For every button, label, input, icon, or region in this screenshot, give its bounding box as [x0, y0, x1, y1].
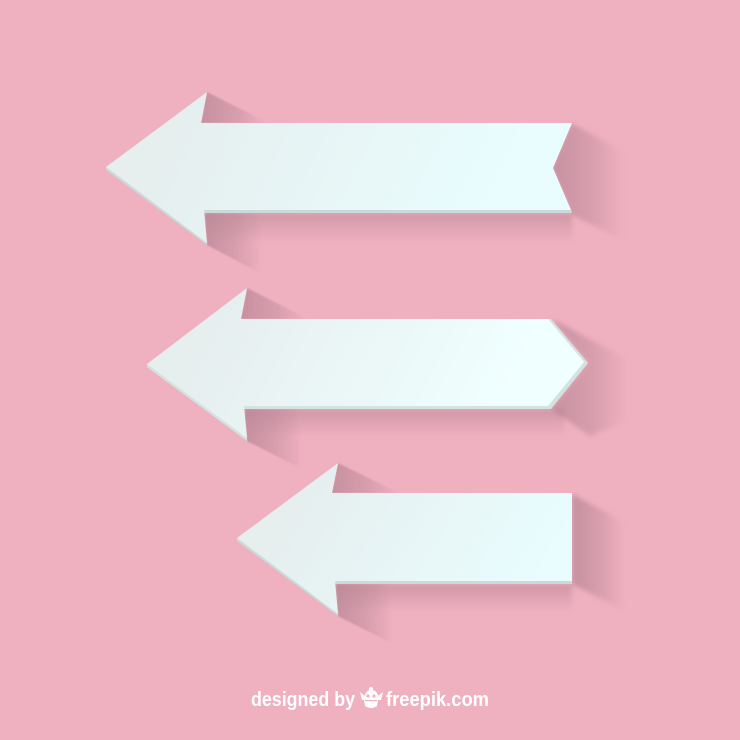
arrow 2 edge: [147, 319, 588, 441]
arrow 3 face: [237, 463, 572, 614]
arrow 2 shadows: [241, 288, 628, 469]
credit: designed by freepik.com: [251, 687, 489, 711]
icon: freepik mascot: [360, 687, 383, 708]
credit: designed by freepik.com: designed by: [251, 689, 356, 711]
arrow 3 shadows: [332, 463, 624, 644]
arrow 1 edge: [106, 167, 572, 245]
arrow 3: bottom, flat tail: [237, 463, 624, 644]
arrow 1: top, notched tail: [106, 92, 624, 274]
arrow 1 face: [106, 92, 572, 243]
arrow 3 edge: [237, 538, 572, 616]
arrow 2 face: [147, 288, 584, 438]
credit: designed by freepik.com: freepik.com: [386, 689, 489, 711]
arrow 2: middle, pointed tail: [147, 288, 628, 469]
arrow 1 shadows: [201, 92, 624, 274]
